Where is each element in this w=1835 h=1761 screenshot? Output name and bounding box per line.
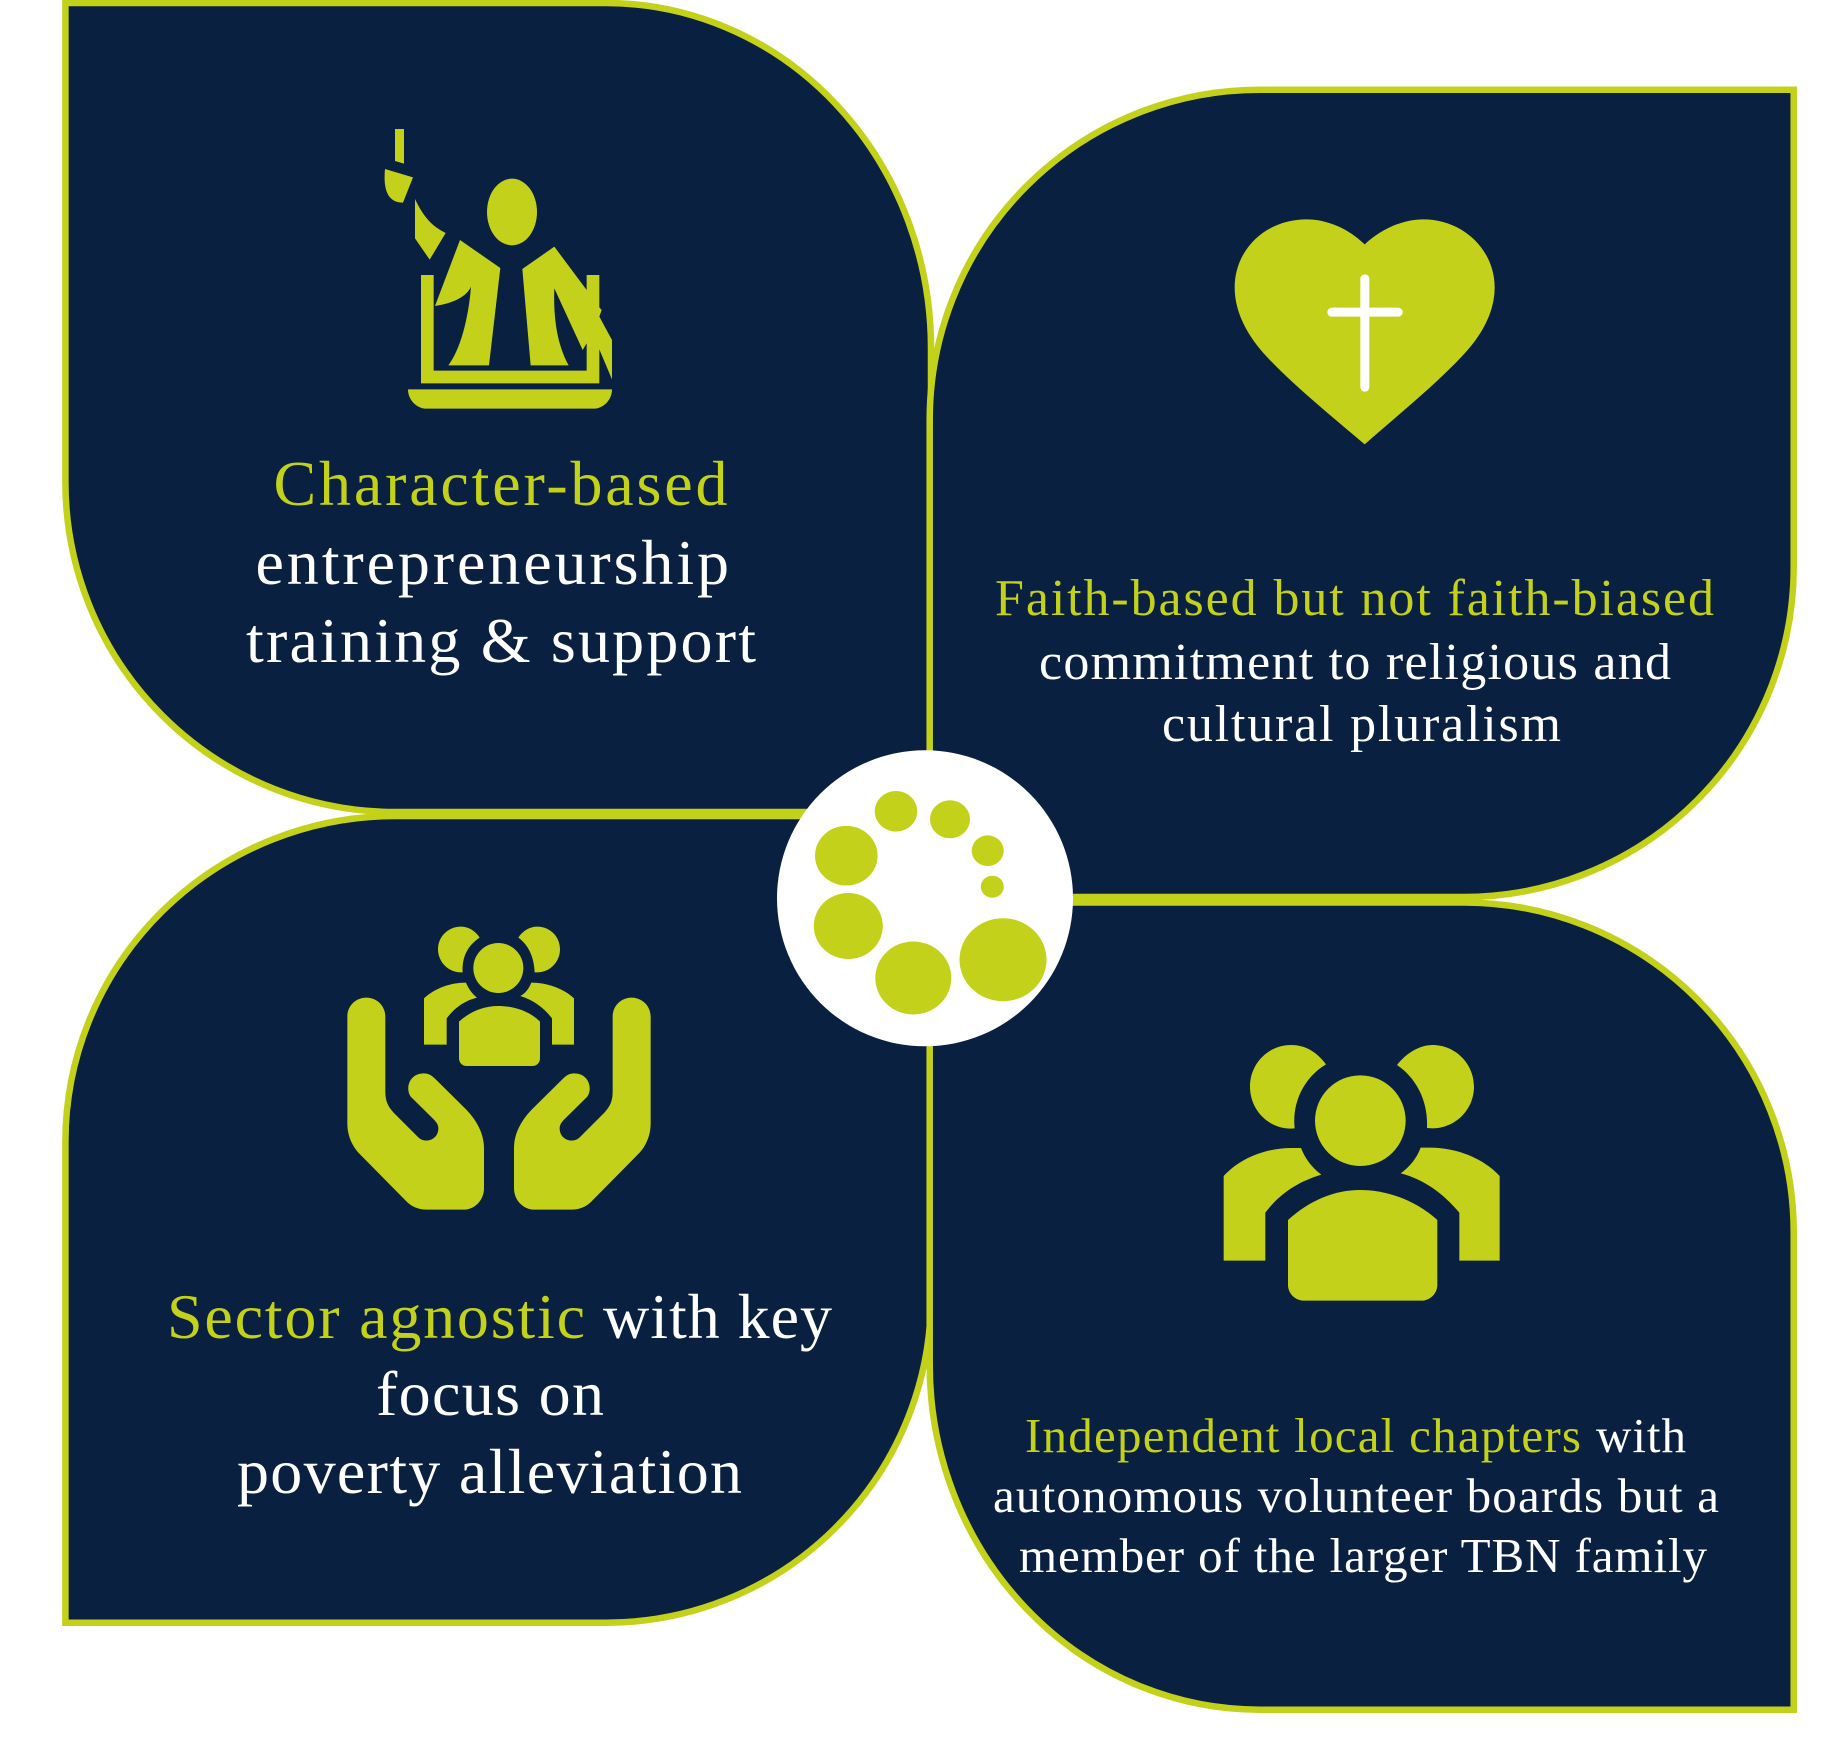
text: independent local chapters bbox=[993, 1408, 1719, 1583]
icon: speaker at podium bbox=[385, 129, 612, 409]
panel shape: bottom left petal bbox=[65, 816, 931, 1623]
icon: hands holding people bbox=[347, 927, 651, 1210]
text: sector agnostic: Sector agnostic bbox=[167, 1281, 585, 1352]
panel shape: bottom right petal bbox=[930, 902, 1794, 1710]
icon: heart with cross bbox=[1235, 219, 1495, 444]
text: character-based: Character-based bbox=[274, 448, 728, 519]
text: faith-based bbox=[995, 570, 1714, 753]
text: independent local chapters: Independent local chapters bbox=[1025, 1408, 1581, 1463]
text: character-based: entrepreneurship bbox=[256, 527, 729, 598]
panel: sector agnostic bbox=[65, 816, 931, 1623]
panel: faith-based bbox=[930, 90, 1794, 897]
text: sector agnostic bbox=[167, 1281, 832, 1507]
text: character-based bbox=[246, 448, 756, 676]
text: faith-based: cultural pluralism bbox=[1162, 696, 1561, 753]
center logo: white circle with dots bbox=[777, 750, 1073, 1046]
icon: group of people bbox=[1224, 1045, 1500, 1301]
text: faith-based: commitment to religious and bbox=[1039, 634, 1671, 691]
text: independent local chapters: with bbox=[1596, 1408, 1686, 1463]
text: faith-based: Faith-based but not faith-biased bbox=[995, 570, 1714, 627]
text: character-based: training & support bbox=[246, 605, 756, 676]
panel: character-based training bbox=[65, 3, 931, 812]
text: independent local chapters: autonomous volunteer boards but a bbox=[993, 1468, 1719, 1523]
text: sector agnostic: with key bbox=[603, 1281, 832, 1352]
text: independent local chapters: member of the larger TBN family bbox=[1019, 1528, 1708, 1583]
panel shape: top right petal bbox=[930, 90, 1794, 897]
text: sector agnostic: poverty alleviation bbox=[237, 1436, 742, 1507]
panel: independent local chapters bbox=[930, 902, 1794, 1710]
text: sector agnostic: focus on bbox=[376, 1358, 604, 1429]
panel shape: top left petal bbox=[65, 3, 931, 812]
